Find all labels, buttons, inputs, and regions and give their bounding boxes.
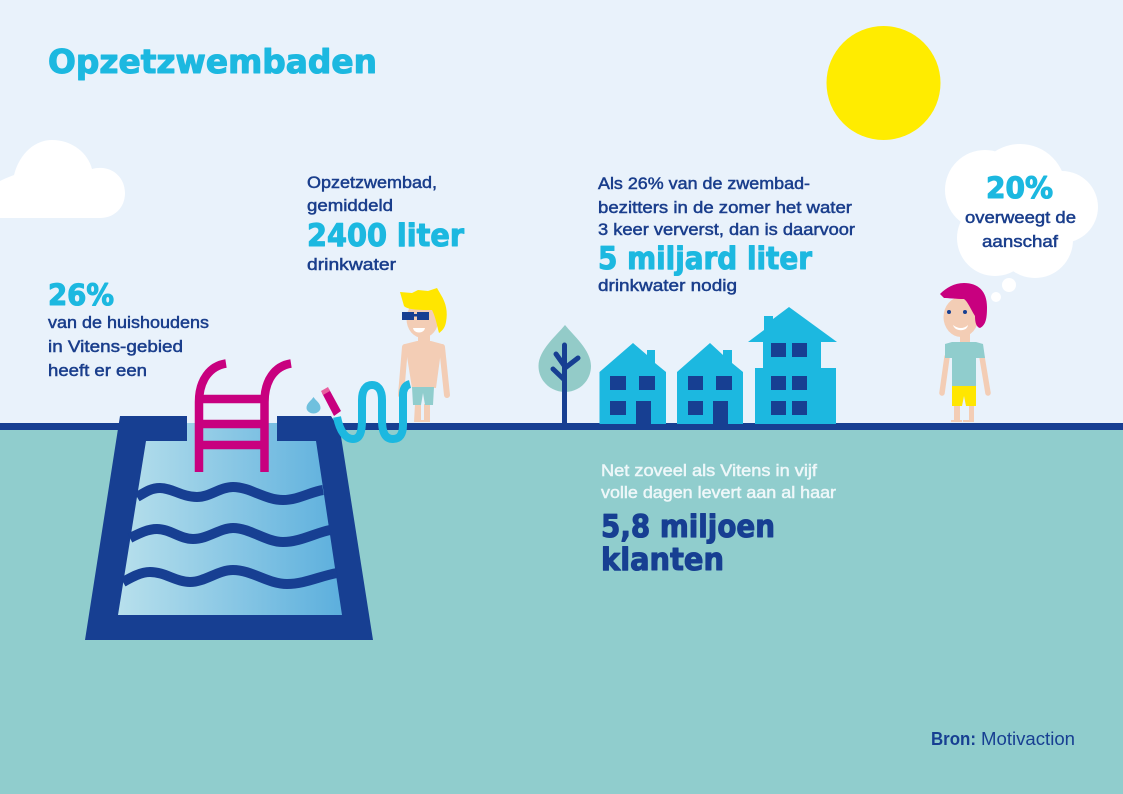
- text: 5 miljard liter: Als 26% van de zwembad-: [598, 174, 810, 193]
- text: 5,8 miljoen klanten: [601, 461, 836, 578]
- text: 5 miljard liter: bezitters in de zomer het water: [598, 198, 852, 217]
- icon: house 2: [677, 343, 743, 424]
- thought bubble: [945, 144, 1098, 302]
- source: [931, 729, 1075, 749]
- text: 5,8 miljoen klanten: volle dagen levert aan al haar: [601, 483, 836, 502]
- text: 2400 liter: drinkwater: [307, 255, 396, 274]
- source: Motivaction: [981, 729, 1075, 749]
- text: 2400 liter: 2400 liter: [307, 218, 465, 254]
- text: 2400 liter: gemiddeld: [307, 196, 393, 215]
- text: 26% households: in Vitens-gebied: [48, 337, 183, 356]
- waves: [123, 487, 337, 584]
- hose: [337, 384, 410, 439]
- text: 5,8 miljoen klanten: klanten: [601, 542, 724, 578]
- text: 20%: overweegt de: [965, 208, 1076, 227]
- ladder: [199, 364, 291, 472]
- icon: sun: [826, 26, 940, 140]
- text: 26% households: [48, 278, 209, 380]
- horizon line: [0, 423, 1123, 430]
- title: Opzetzwembaden: [48, 42, 377, 81]
- text: 5 miljard liter: drinkwater nodig: [598, 276, 737, 295]
- text: 20%: 20%: [986, 171, 1053, 205]
- person: boy with magenta hair: [940, 283, 988, 422]
- text: 5 miljard liter: 5 miljard liter: [598, 241, 813, 277]
- ground: [0, 430, 1123, 794]
- text: 2400 liter: [307, 173, 465, 274]
- text: 26% households: 26%: [48, 278, 114, 312]
- pool frame: [85, 416, 373, 640]
- text: 26% households: van de huishoudens: [48, 313, 209, 332]
- text: 20%: [965, 171, 1076, 251]
- source: Bron:: [931, 729, 976, 749]
- icon: house 3: [748, 307, 837, 424]
- text: 2400 liter: Opzetzwembad,: [307, 173, 437, 192]
- icon: house 1: [600, 343, 666, 424]
- icon: tree: [538, 325, 591, 423]
- text: 5 miljard liter: 3 keer ververst, dan is daarvoor: [598, 220, 855, 239]
- text: 26% households: heeft er een: [48, 361, 147, 380]
- text: 20%: aanschaf: [982, 232, 1058, 251]
- person: boy with sunglasses: [400, 288, 447, 422]
- icon: water drop: [306, 397, 320, 414]
- text: 5,8 miljoen klanten: Net zoveel als Vitens in vijf: [601, 461, 817, 480]
- pool water: [118, 423, 342, 615]
- text: 5,8 miljoen klanten: 5,8 miljoen: [601, 509, 775, 545]
- icon: cloud: [0, 140, 125, 218]
- hose nozzle: [321, 387, 341, 416]
- pool: [85, 364, 373, 640]
- text: 5 miljard liter: [598, 174, 855, 295]
